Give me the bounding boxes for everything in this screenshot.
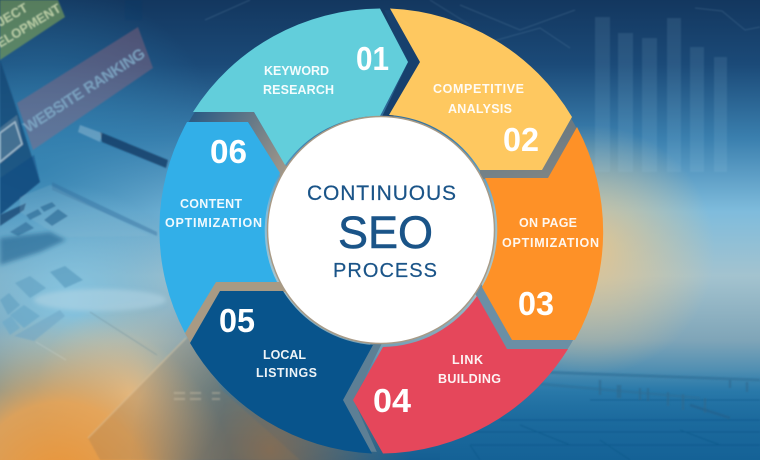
- segment 03: on page optimization: [482, 127, 603, 340]
- segment 05: local listings: [190, 291, 373, 454]
- network lines top: [205, 0, 760, 48]
- laptop and website ranking photo: [0, 0, 168, 237]
- segment 02: competitive analysis: COMPETITIVE: [433, 82, 524, 96]
- segment 01: keyword research: 01: [356, 40, 389, 77]
- segment 02: competitive analysis: [389, 8, 572, 170]
- segment 04: link building: LINK: [452, 353, 483, 367]
- segment 03: on page optimization: ON PAGE: [519, 216, 577, 230]
- segment 01: keyword research: RESEARCH: [263, 83, 334, 97]
- segment 06: content optimization: OPTIMIZATION: [165, 216, 262, 230]
- center circle with title: [268, 116, 494, 344]
- hand on keyboard photo: [0, 232, 166, 311]
- segment 04: link building: 04: [373, 382, 412, 419]
- bridge and floor bottom right: [450, 372, 760, 460]
- gaps between segments: [185, 10, 576, 452]
- segment 01: keyword research: KEYWORD: [264, 64, 329, 78]
- segment 05: local listings: LOCAL: [263, 348, 306, 362]
- title: continuous: CONTINUOUS: [307, 182, 456, 205]
- segment 01: keyword research: [193, 8, 408, 165]
- segment 03: on page optimization: OPTIMIZATION: [502, 236, 599, 250]
- segment 04: link building: BUILDING: [438, 372, 501, 386]
- segment 05: local listings: LISTINGS: [256, 366, 317, 380]
- segment 02: competitive analysis: 02: [503, 121, 539, 158]
- segment 06: content optimization: CONTENT: [180, 197, 242, 211]
- laptop and website ranking photo: WEBSITE RANKING: [21, 45, 148, 136]
- title: seo: SEO: [338, 207, 433, 258]
- segment 05: local listings: 05: [219, 302, 255, 339]
- segment 04: link building: [353, 296, 568, 454]
- chart bars top right: [595, 17, 727, 172]
- segment 06: content optimization: [159, 122, 280, 333]
- segment 02: competitive analysis: ANALYSIS: [448, 102, 512, 116]
- segment 06: content optimization: 06: [210, 133, 247, 170]
- title: process: PROCESS: [333, 260, 437, 282]
- segment 03: on page optimization: 03: [518, 285, 554, 322]
- circular process diagram: [159, 0, 603, 460]
- bottom left building perspective: [88, 335, 300, 460]
